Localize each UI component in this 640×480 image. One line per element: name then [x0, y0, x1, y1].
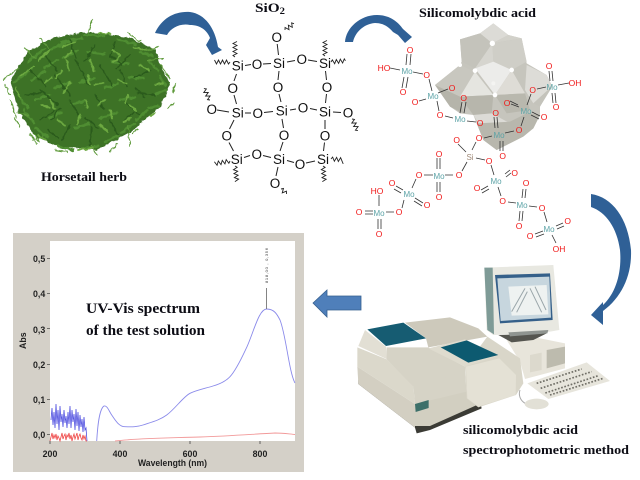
diagram: silicomolybdic acid molecule: O: [539, 203, 546, 213]
sample tray: [428, 339, 499, 367]
diagram: silicomolybdic acid molecule: O: [504, 98, 511, 108]
chart title: UV-Vis spectrum: [86, 301, 200, 317]
diagram: silicomolybdic acid molecule: O: [511, 168, 518, 178]
diagram: silicomolybdic acid molecule: O: [416, 170, 423, 180]
computer tower: [507, 338, 565, 379]
diagram: silicomolybdic acid molecule: O: [474, 183, 481, 193]
diagram: silicomolybdic acid molecule: Mo: [490, 177, 502, 186]
diagram: silicomolybdic acid molecule: O: [400, 87, 407, 97]
diagram: SiO2 network structure: [202, 22, 360, 196]
diagram: silicomolybdic acid molecule: O: [477, 118, 484, 128]
diagram: silicomolybdic acid molecule: O: [424, 200, 431, 210]
diagram: silicomolybdic acid molecule: O: [499, 196, 506, 206]
front right panel: [413, 372, 467, 404]
diagram: silicomolybdic acid molecule: O: [437, 110, 444, 120]
x axis labels: [43, 449, 267, 459]
y axis labels: 0,2: [33, 360, 45, 370]
left upper front: [357, 347, 415, 404]
diagram: silicomolybdic acid molecule: Mo: [427, 92, 439, 101]
red noise trace: [50, 433, 87, 441]
image: spectrophotometer: [357, 317, 523, 433]
blue spectrum curve: [97, 309, 295, 441]
heading: SiO2: SiO: [255, 0, 276, 15]
panel: UV-Vis spectrum chart: [13, 233, 304, 472]
diagram: silicomolybdic acid molecule: HO: [378, 63, 391, 73]
diagram: silicomolybdic acid molecule: O: [453, 135, 460, 145]
arrow: herb to SiO2: [155, 12, 222, 55]
diagram: silicomolybdic acid molecule: O: [527, 231, 534, 241]
diagram: silicomolybdic acid molecule: Mo: [433, 172, 445, 181]
image: horsetail herb pile: [3, 20, 176, 155]
diagram: SiO2 network structure: O: [295, 157, 305, 172]
diagram: silicomolybdic acid molecule: O: [523, 178, 530, 188]
diagram: SiO2 network structure: O: [221, 128, 232, 144]
diagram: silicomolybdic acid molecule: O: [564, 216, 571, 226]
diagram: silicomolybdic acid molecule: O: [486, 156, 493, 166]
monitor stand: [498, 333, 547, 342]
diagram: silicomolybdic acid molecule: O: [449, 83, 456, 93]
diagram: silicomolybdic acid molecule: O: [412, 97, 419, 107]
diagram: silicomolybdic acid molecule: O: [456, 170, 463, 180]
y axis title: Abs: [18, 332, 28, 349]
arrow: SiO2 to silicomolybdic acid: [345, 15, 412, 43]
diagram: SiO2 network structure: O: [279, 128, 289, 143]
y axis labels: 0,0: [33, 430, 45, 440]
back cover: [405, 317, 487, 347]
y axis labels: 0,1: [33, 395, 45, 405]
diagram: SiO2 network structure: O: [320, 128, 330, 144]
keyboard: [527, 362, 610, 399]
top surface: [387, 347, 465, 387]
diagram: silicomolybdic acid molecule: O: [546, 61, 553, 71]
diagram: silicomolybdic acid molecule: O: [396, 207, 403, 217]
diagram: silicomolybdic acid molecule: Mo: [373, 209, 385, 218]
diagram: silicomolybdic acid molecule: O: [436, 149, 443, 159]
diagram: SiO2 network structure: O: [273, 80, 283, 95]
x axis labels: 800: [253, 449, 267, 459]
diagram: SiO2 network structure: Si: [317, 152, 329, 167]
plot area: [50, 241, 295, 441]
diagram: silicomolybdic acid molecule: Mo: [516, 201, 528, 210]
diagram: silicomolybdic acid molecule: O: [553, 102, 560, 112]
peak label: 818,00 , 0,356: [264, 247, 269, 283]
diagram: SiO2 network structure: Si: [319, 104, 331, 120]
right block: [465, 337, 523, 407]
blue noise trace: [51, 404, 87, 441]
diagram: silicomolybdic acid molecule: O: [476, 133, 483, 143]
diagram: silicomolybdic acid molecule: O: [529, 85, 536, 95]
diagram: SiO2 network structure: O: [252, 106, 263, 121]
caption: silicomolybdic acid spectrophotometric method: silicomolybdic acid: [463, 423, 578, 437]
x axis title: Wavelength (nm): [138, 458, 207, 468]
lower front panel: [415, 392, 481, 426]
instrument shadow: [358, 380, 482, 433]
teal lid: [367, 323, 426, 346]
diagram: silicomolybdic acid molecule: O: [389, 178, 396, 188]
caption: silicomolybdic acid spectrophotometric method: spectrophotometric method: [463, 443, 629, 457]
lid base: [358, 330, 387, 359]
diagram: silicomolybdic acid molecule: Mo: [401, 67, 413, 76]
diagram: silicomolybdic acid molecule: HO: [371, 186, 384, 196]
diagram: silicomolybdic acid molecule: O: [460, 93, 467, 103]
diagram: SiO2 network structure: O: [227, 81, 238, 96]
image: computer: [484, 265, 610, 409]
diagram: silicomolybdic acid molecule: Mo: [546, 83, 558, 92]
peak marker: [266, 288, 268, 309]
heading: Silicomolybdic acid: Silicomolybdic acid: [419, 6, 536, 20]
y axis labels: 0,3: [33, 325, 45, 335]
chart title: [86, 301, 205, 339]
green label: [415, 400, 429, 412]
arrow: instrument to spectrum: [313, 290, 361, 317]
diagram: SiO2 network structure: Si: [276, 104, 288, 118]
diagram: silicomolybdic acid molecule: O: [423, 70, 430, 80]
left lower front: [357, 367, 415, 428]
diagram: silicomolybdic acid molecule: O: [516, 125, 523, 135]
y axis labels: [33, 254, 260, 444]
y axis labels: 0,5: [33, 254, 45, 264]
diagram: silicomolybdic acid molecule: O: [541, 112, 548, 122]
diagram: silicomolybdic acid molecule: O: [499, 151, 506, 161]
diagram: silicomolybdic acid molecule: Mo: [493, 131, 505, 140]
diagram: SiO2 network structure: O: [343, 106, 353, 120]
diagram: silicomolybdic acid molecule: OH: [569, 78, 581, 88]
diagram: silicomolybdic acid molecule: O: [492, 108, 499, 118]
diagram: SiO2 network structure: O: [270, 176, 280, 191]
x axis labels: 600: [183, 449, 197, 459]
diagram: silicomolybdic acid molecule: O: [356, 207, 363, 217]
chart title: of the test solution: [86, 323, 205, 339]
diagram: SiO2 network structure: Si: [273, 152, 285, 167]
diagram: silicomolybdic acid molecule: O: [407, 45, 414, 55]
red baseline curve: [115, 433, 295, 441]
diagram: SiO2 network structure: O: [206, 102, 217, 117]
diagram: SiO2 network structure: O: [296, 52, 307, 67]
diagram: SiO2 network structure: O: [251, 147, 262, 162]
x axis labels: 400: [113, 449, 127, 459]
diagram: silicomolybdic acid molecule: Mo: [454, 115, 466, 124]
diagram: silicomolybdic acid molecule: Mo: [403, 190, 415, 199]
diagram: silicomolybdic acid molecule: O: [436, 192, 443, 202]
monitor: [484, 265, 559, 335]
diagram: silicomolybdic acid molecule: O: [516, 221, 523, 231]
diagram: SiO2 network structure: O: [271, 30, 282, 45]
diagram: silicomolybdic acid molecule: Si: [466, 153, 474, 162]
y axis labels: 0,4: [33, 289, 45, 299]
diagram: SiO2 network structure: Si: [232, 58, 244, 74]
diagram: SiO2 network structure: O: [298, 100, 308, 116]
heading: SiO2: 2: [280, 6, 286, 16]
diagram: silicomolybdic acid molecule: O: [376, 229, 383, 239]
caption: silicomolybdic acid spectrophotometric method: [463, 423, 629, 457]
diagram: SiO2 network structure: Si: [231, 152, 243, 167]
diagram: polyoxometalate polyhedra: [435, 23, 552, 150]
diagram: SiO2 network structure: O: [252, 57, 262, 72]
diagram: SiO2 network structure: Si: [232, 106, 244, 120]
diagram: silicomolybdic acid molecule: OH: [553, 244, 565, 254]
x axis labels: 200: [43, 449, 57, 459]
diagram: SiO2 network structure: Si: [273, 56, 285, 71]
diagram: SiO2 network structure: Si: [319, 56, 331, 71]
diagram: silicomolybdic acid molecule: Mo: [520, 107, 532, 116]
diagram: silicomolybdic acid molecule: [356, 45, 581, 254]
arrow: molecule to spectrophotometer: [591, 194, 631, 325]
diagram: SiO2 network structure: O: [322, 80, 332, 95]
teal window: [441, 340, 498, 363]
diagram: silicomolybdic acid molecule: Mo: [543, 225, 555, 234]
mouse: [519, 390, 549, 409]
caption: Horsetail herb: Horsetail herb: [41, 170, 127, 184]
